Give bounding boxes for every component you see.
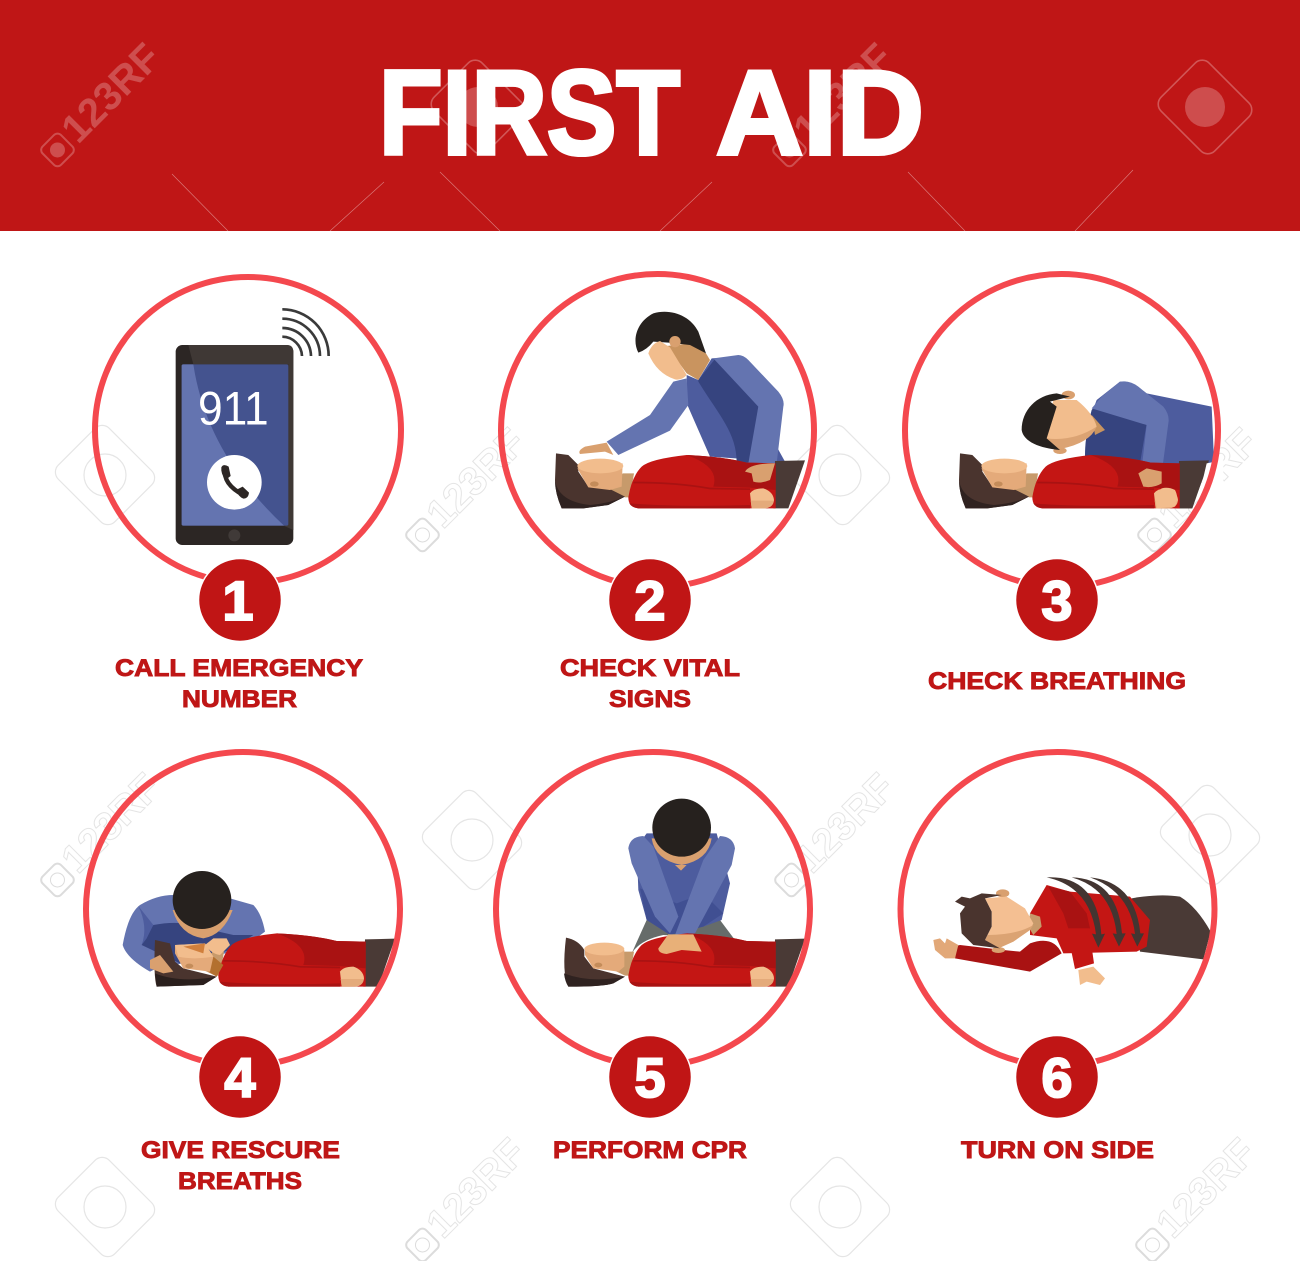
- watermarks: 123RF: [418, 420, 534, 536]
- watermarks: 123RF: [787, 765, 903, 881]
- number badge 1: 1: [222, 569, 254, 632]
- illustration 4: [123, 871, 395, 987]
- ring 5: [496, 752, 810, 1066]
- label 2: CHECK VITAL: [560, 655, 740, 682]
- number badge 5: [608, 1036, 692, 1118]
- panel: step 6 turn on side: [900, 752, 1214, 1164]
- ring 4: [86, 752, 400, 1066]
- title: AID: [716, 46, 924, 180]
- watermarks: 123RF: [1148, 1130, 1264, 1246]
- header banner: 123RF: [785, 35, 901, 151]
- ring 3: [905, 274, 1218, 587]
- number badge 2: 2: [634, 569, 666, 632]
- number badge 1: [198, 558, 282, 642]
- icon: phone: 911: [198, 381, 269, 434]
- label 3: CHECK BREATHING: [928, 668, 1186, 695]
- icon: phone: [176, 309, 329, 545]
- panel: step 3 check breathing: [905, 274, 1223, 695]
- ring 1: [95, 277, 401, 583]
- label 1: NUMBER: [182, 686, 297, 713]
- panel: step 5 perform CPR: [496, 752, 810, 1164]
- label 6: TURN ON SIDE: [961, 1137, 1154, 1164]
- header banner: [0, 0, 1300, 231]
- watermarks: 123RF: [1150, 420, 1266, 536]
- ring 6: [900, 752, 1214, 1066]
- watermarks: [31, 420, 1266, 1261]
- panel: step 4 give rescue breaths: [86, 752, 400, 1195]
- title: [379, 46, 924, 180]
- number badge 5: 5: [634, 1046, 666, 1109]
- label 5: PERFORM CPR: [553, 1137, 747, 1164]
- label 1: CALL EMERGENCY: [115, 655, 363, 682]
- number badge 4: 4: [224, 1046, 256, 1109]
- number badge 2: [608, 558, 692, 642]
- arrows: [1047, 877, 1144, 948]
- ring 2: [501, 274, 814, 587]
- label 2: SIGNS: [609, 686, 691, 713]
- number badge 3: 3: [1041, 569, 1073, 632]
- illustration 3: [959, 381, 1223, 513]
- label 1: [115, 655, 363, 713]
- illustration 2: [555, 312, 805, 508]
- panel: step 1 call emergency number: [95, 277, 401, 713]
- title: FIRST: [379, 46, 680, 180]
- watermarks: 123RF: [418, 1130, 534, 1246]
- illustration 6: [933, 877, 1211, 985]
- header banner: 123RF: [53, 35, 169, 151]
- number badge 6: [1016, 1036, 1098, 1118]
- number badge 6: 6: [1041, 1046, 1073, 1109]
- watermarks: 123RF: [53, 765, 169, 881]
- label 2: [560, 655, 740, 713]
- panel: step 2 check vital signs: [501, 274, 814, 713]
- number badge 3: [1016, 558, 1098, 642]
- label 4: GIVE RESCURE: [141, 1137, 340, 1164]
- label 4: BREATHS: [178, 1168, 302, 1195]
- illustration 5: [564, 799, 805, 987]
- label 4: [141, 1137, 340, 1195]
- number badge 4: [198, 1036, 282, 1118]
